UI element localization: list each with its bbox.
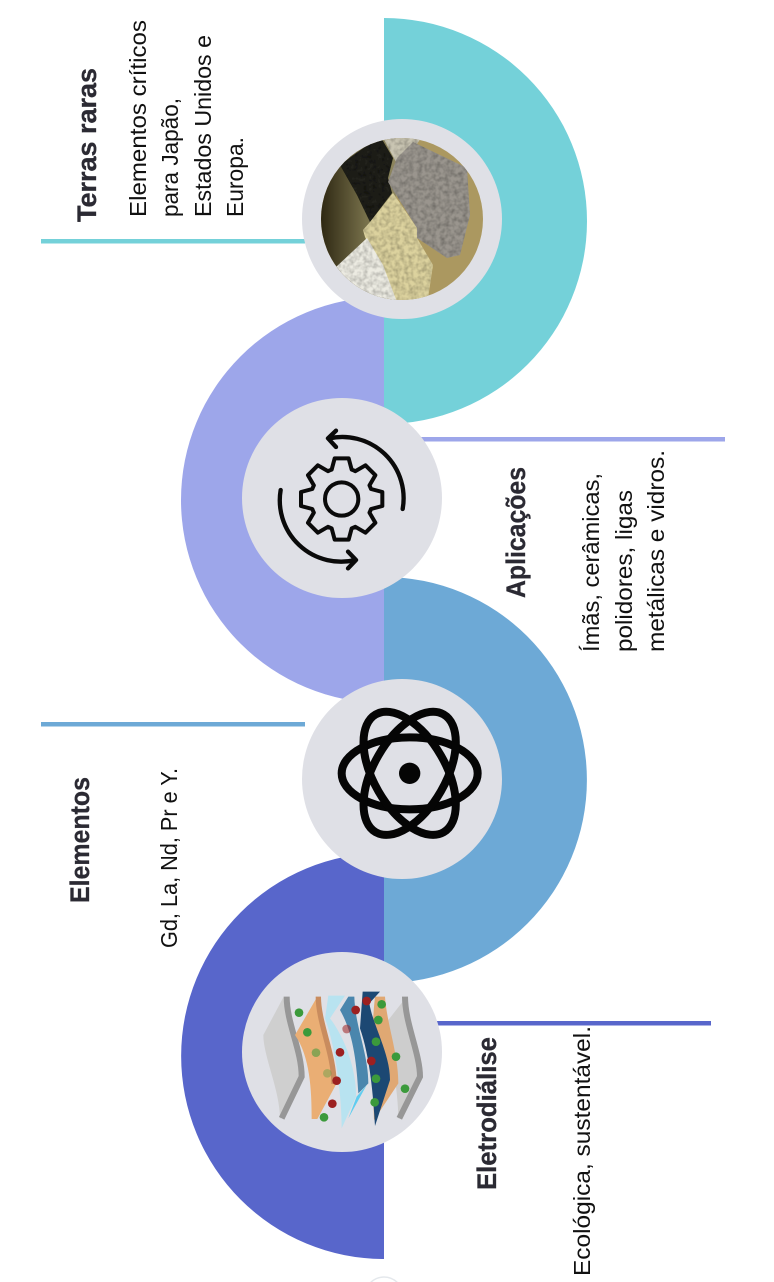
half-circle bands bbox=[181, 18, 587, 1259]
panel: Aplicações bbox=[242, 398, 725, 652]
panel: Terras raras bbox=[41, 20, 502, 319]
body text: polidores, ligas bbox=[611, 490, 637, 652]
icon: gear with arrows bbox=[280, 431, 404, 568]
body text: Gd, La, Nd, Pr e Y. bbox=[156, 768, 182, 948]
body text: Ímãs, cerâmicas, bbox=[578, 473, 604, 652]
body text: Ecológica, sustentável. bbox=[569, 1026, 595, 1276]
icon: electrodialysis membranes bbox=[263, 992, 422, 1128]
body text: Europa. bbox=[222, 137, 248, 217]
icon: atom bbox=[342, 696, 478, 850]
red ions bbox=[328, 997, 376, 1108]
heading: Terras raras bbox=[72, 68, 102, 222]
body text: Estados Unidos e bbox=[190, 35, 216, 217]
body text: para Japão, bbox=[157, 98, 183, 217]
body text bbox=[125, 20, 248, 217]
faint circle at bottom edge bbox=[365, 1277, 403, 1282]
heading: Aplicações bbox=[501, 467, 531, 598]
panel: Elementos bbox=[41, 679, 502, 948]
green ions bbox=[295, 1000, 409, 1122]
body text: Elementos críticos bbox=[125, 20, 151, 217]
heading: Elementos bbox=[65, 777, 95, 903]
photo: rare earth powders bbox=[321, 132, 483, 310]
panel: Eletrodiálise bbox=[242, 952, 711, 1276]
body text: metálicas e vidros. bbox=[643, 450, 669, 652]
body text bbox=[578, 450, 669, 652]
heading: Eletrodiálise bbox=[472, 1037, 502, 1190]
